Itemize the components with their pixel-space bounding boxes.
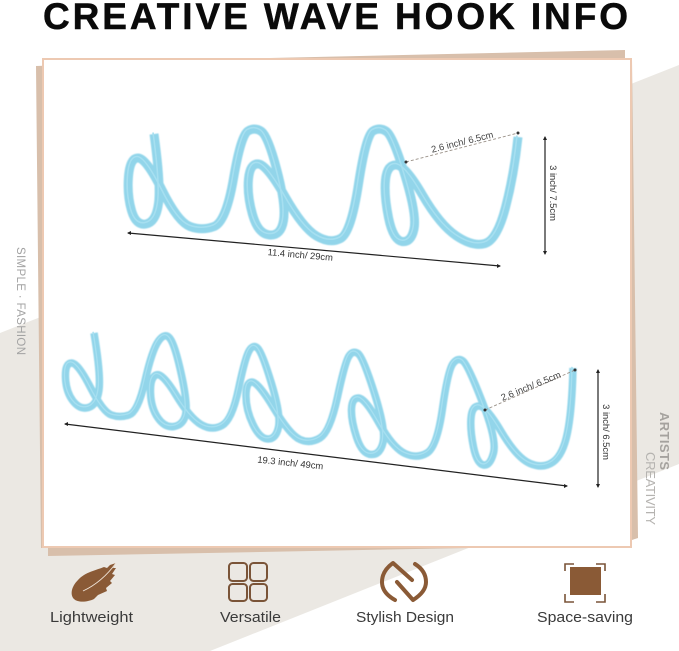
main white panel (43, 59, 631, 547)
icon: space square (565, 564, 605, 602)
dimensions: lower rack (64, 368, 612, 488)
panel backing (36, 50, 638, 556)
dimensions: upper rack (127, 129, 559, 268)
label: lightweight: Lightweight (50, 610, 133, 626)
dimensions: lower rack: 19.3 inch/ 49cm (257, 454, 324, 471)
icon: feather (72, 563, 116, 602)
dimensions: lower rack: 3 inch/ 6.5cm (601, 404, 612, 460)
label: versatile: Versatile (220, 610, 281, 626)
dimensions: upper rack: 2.6 inch/ 6.5cm (430, 129, 495, 155)
product: five-hook wave rack (64, 332, 573, 466)
label: space-saving: Space-saving (537, 610, 633, 626)
dimensions: lower rack: 2.6 inch/ 6.5cm (499, 369, 562, 403)
dimensions: upper rack: 11.4 inch/ 29cm (267, 246, 334, 263)
side text: artists: ARTISTS (657, 412, 672, 470)
side text: creativity: CREATIVITY (643, 452, 658, 525)
label: stylish design: Stylish Design (356, 610, 454, 626)
product: three-hook wave rack (127, 128, 518, 244)
side text: simple fashion: SIMPLE · FASHION (14, 247, 26, 355)
icon: grid (229, 563, 267, 601)
icon: interlocked circle (382, 563, 426, 600)
dimensions: upper rack: 3 inch/ 7.5cm (548, 165, 559, 221)
